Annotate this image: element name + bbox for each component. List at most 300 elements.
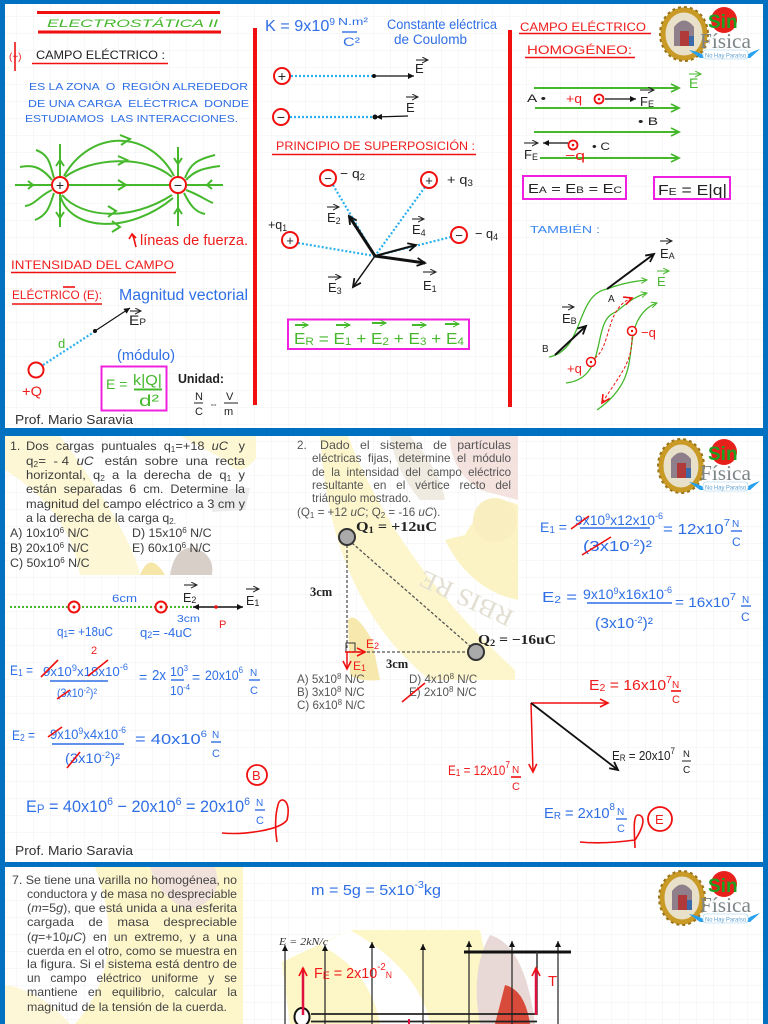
diagram: suma vectorial: 1	[456, 768, 461, 779]
watermark: escudo problema 2: RBIS RE	[415, 564, 518, 631]
formula box: FE = E|q|: FE = E|q|	[658, 183, 727, 199]
text: enunciado problema 1: N/C	[64, 526, 89, 540]
solución: E2: )²	[110, 750, 120, 766]
formula box: EA = EB = EC: E A = E B = E C	[528, 182, 623, 196]
text: enunciado problema 2: de la intensidad del campo eléctrico	[312, 466, 511, 479]
text: enunciado problema 2: triángulo mostrado.	[312, 492, 411, 505]
diagram: triángulo de cargas: = −16uC	[495, 632, 556, 647]
respuesta: E	[648, 807, 672, 831]
text: enunciado problema 2: 8	[338, 698, 343, 707]
text: enunciado problema 1: y	[231, 468, 246, 482]
diagram: superposición de campos: 2	[360, 172, 365, 182]
text: enunciado problema 2: = +12 uC; Q	[318, 506, 381, 519]
diagram: cargas en la recta: = -4uC	[152, 625, 192, 640]
formula box: E = k|Q|/d²: d²	[139, 393, 160, 410]
solución: E2 problema 2: = 16x10	[675, 594, 725, 610]
diagram: suma vectorial: 7	[666, 675, 672, 686]
text: enunciado problema 1: 6	[182, 526, 187, 535]
solución: E1 problema 2: =	[555, 519, 567, 535]
diagram: cargas en la recta: q	[57, 624, 64, 639]
formula box: E = k|Q|/d²: E =	[106, 376, 127, 392]
text: enunciado problema 1: 2	[100, 474, 105, 483]
solución: E2	[12, 725, 221, 768]
diagram: superposición de campos: E	[327, 210, 336, 225]
solución: E2: x4x10	[83, 727, 118, 742]
solución: EP: − 20x10	[113, 797, 176, 816]
heading: campo eléctrico homogéneo: HOMOGÉNEO:	[527, 42, 632, 57]
solución: E1: =	[192, 669, 200, 685]
diagram: campo de carga positiva: +	[278, 68, 286, 84]
text: enunciado problema 1: 2.	[169, 517, 176, 526]
diagram: suma vectorial	[448, 675, 691, 793]
diagram: superposición de campos: +q	[268, 217, 283, 232]
formula: masa: m = 5g = 5x10	[311, 882, 407, 899]
solución: ER	[544, 802, 627, 835]
text: unidad: ⇔	[209, 399, 218, 409]
text: enunciado problema 2: Dado el sistema de partículas	[320, 439, 511, 452]
diagram: triángulo de cargas: 2	[490, 638, 496, 648]
solución: E1: )²	[90, 686, 97, 700]
diagram: campo uniforme: −q	[565, 148, 585, 163]
text: enunciado problema 7: la figura. Si el sistema está dentro de	[27, 957, 237, 971]
diagram: campo de carga negativa	[273, 97, 418, 125]
diagram: cargas en la recta: 3cm	[177, 614, 200, 625]
solución: E2: 9x10	[50, 727, 79, 742]
formula: constante de Coulomb: Constante eléctrica	[387, 17, 497, 32]
diagram: campo no uniforme: E	[660, 246, 669, 261]
diagram: suma vectorial: = 20x10	[626, 748, 671, 763]
diagram: cargas en la recta	[10, 585, 259, 640]
text: enunciado problema 7: conductora y de masa no despreciable	[27, 887, 237, 901]
solución: EP: 6	[176, 796, 181, 808]
solución: E2: 9	[78, 726, 83, 736]
solución: E1 problema 2: C	[732, 535, 741, 549]
text: enunciado problema 2: D) 4x10	[409, 673, 450, 686]
diagram: campo de carga positiva	[274, 60, 428, 84]
diagram: campo uniforme: E	[689, 75, 698, 91]
solución: EP: 6	[107, 796, 113, 808]
solución: E2: E	[12, 727, 21, 743]
formula box: E = k|Q|/d²: k|Q|	[133, 372, 162, 389]
respuesta: B	[247, 765, 267, 785]
formula: constante de Coulomb: de Coulomb	[394, 32, 467, 47]
text: enunciado problema 1: N/C	[187, 526, 212, 540]
text: enunciado problema 2	[297, 439, 511, 712]
solución: E2: N	[212, 730, 219, 741]
text: unidad: N	[195, 391, 203, 403]
formula box: campo resultante: 3	[420, 336, 426, 348]
solución: ER: E	[544, 805, 554, 822]
icon: charge symbol	[9, 42, 22, 71]
text: enunciado problema 2: N/C	[341, 673, 365, 686]
diagram: triángulo de cargas: E	[353, 659, 361, 673]
text: unidad: m	[224, 406, 233, 418]
text: enunciado problema 7: magnitud de la tensión de la cuerda.	[27, 1000, 227, 1014]
diagram: campo uniforme: +q	[566, 91, 582, 106]
solución: E2 problema 2: -6	[664, 585, 672, 595]
logo: sin física: Física	[700, 29, 752, 53]
text: enunciado problema 2: 8	[449, 685, 454, 694]
solución: E1: C	[250, 685, 258, 697]
diagram: varilla en campo uniforme	[278, 936, 571, 1024]
diagram: suma vectorial: 2	[600, 683, 606, 694]
diagram: cargas en la recta: q	[140, 625, 147, 640]
diagram: cargas en la recta: 1	[254, 598, 259, 608]
respuesta: E: E	[655, 812, 664, 827]
diagram: suma vectorial: N	[512, 765, 519, 776]
text: enunciado problema 1: q	[26, 454, 33, 468]
text: enunciado problema 1: 2	[33, 460, 39, 469]
text: enunciado problema 1: E) 60x10	[132, 541, 182, 555]
solución: E1: 2x	[152, 667, 166, 684]
formula box: campo resultante: + E	[351, 331, 382, 348]
text: enunciado problema 1: 6	[60, 526, 65, 535]
diagram: campo de carga positiva: E	[415, 61, 424, 76]
diagram: campo de carga puntual: +Q	[22, 383, 42, 399]
text: enunciado problema 1: 1	[227, 474, 232, 483]
diagram: superposición de campos: + q	[447, 172, 465, 187]
solución: E1 problema 2: 7	[724, 518, 730, 529]
text: también: TAMBIÉN :	[530, 223, 600, 236]
diagram: suma vectorial: N	[683, 749, 690, 760]
diagram: varilla en campo uniforme: -2	[377, 962, 386, 973]
solución: E1: -2	[84, 686, 90, 695]
positive charge	[52, 177, 68, 193]
text: enunciado problema 2: resultante en el vértice recto del	[312, 479, 511, 492]
formula: constante de Coulomb: K = 9x10	[265, 18, 329, 35]
diagram: suma vectorial: R	[620, 753, 626, 763]
solución: E2 problema 2: C	[741, 610, 750, 624]
diagram: varilla en campo uniforme: E = 2kN/c	[278, 936, 328, 948]
text: enunciado problema 1: a la derecha de q	[105, 468, 227, 482]
diagram: superposición de campos: 3	[467, 178, 473, 188]
diagram: superposición de campos: +	[286, 233, 294, 248]
diagram: suma vectorial: C	[683, 765, 690, 776]
diagram: triángulo de cargas: 3cm	[310, 585, 333, 599]
solución: EP	[26, 796, 265, 827]
solución: EP: N	[256, 798, 263, 809]
formula box: campo resultante: 2	[382, 336, 389, 348]
logo: sin física 2: No Hay Paraíso	[705, 486, 747, 492]
text: definición	[25, 80, 249, 125]
diagram: superposición de campos: E	[328, 280, 337, 295]
flourish: subrayado E	[580, 815, 643, 848]
solución: E2 problema 2: x16x10	[619, 586, 664, 602]
solución: E1 problema 2: E	[540, 519, 549, 535]
diagram: superposición de campos: −	[324, 171, 332, 186]
callout: líneas de fuerza: líneas de fuerza.	[140, 232, 248, 249]
diagram: campo no uniforme: E	[562, 311, 571, 326]
diagram: triángulo de cargas: 3cm	[386, 657, 409, 671]
diagram: superposición de campos: − q	[340, 166, 358, 181]
text: enunciado problema 1: N/C	[65, 556, 90, 570]
formula box: campo resultante: + E	[389, 331, 420, 348]
text: enunciado problema 1: 6	[182, 541, 187, 550]
text: enunciado problema 2: 8	[337, 672, 342, 681]
formula box: campo resultante: R	[305, 336, 314, 348]
diagram: triángulo de cargas: Q	[356, 519, 367, 534]
solución: E2 problema 2	[542, 585, 751, 632]
formula box: campo resultante: E	[294, 331, 305, 348]
diagram: suma vectorial: = 16x10	[605, 677, 666, 694]
formula box: FE = E|q|	[654, 177, 730, 199]
text: enunciado problema 2: N/C	[454, 673, 477, 686]
diagram: superposición de campos: 1	[282, 223, 287, 233]
respuesta: B: B	[252, 768, 261, 783]
solución: E2 problema 2: N	[742, 595, 749, 606]
solución: E1: 2	[91, 645, 97, 657]
logo: sin física 3: No Hay Paraíso	[705, 918, 747, 924]
heading: campo eléctrico homogéneo: CAMPO ELÉCTRICO	[520, 19, 646, 34]
diagram: campo no uniforme: A	[608, 294, 615, 305]
text: enunciado problema 2: 8	[450, 672, 455, 681]
text: enunciado problema 1: C) 50x10	[10, 556, 60, 570]
diagram: cargas en la recta: E	[246, 594, 254, 608]
solución: E1: 3	[184, 664, 189, 673]
text: enunciado problema 7: mantiene en equilibrio, calcular la	[27, 985, 237, 999]
solución: E1: 9	[72, 663, 77, 673]
diagram: suma vectorial: E	[612, 748, 621, 763]
solución: E2 problema 2: 2	[554, 595, 562, 606]
formula box: E = k|Q|/d²	[102, 366, 166, 410]
text: enunciado problema 7: cuerda en el otro, como se muestra en	[27, 944, 237, 958]
diagram: varilla en campo uniforme: F	[314, 965, 323, 982]
diagram: triángulo de cargas: = +12uC	[374, 519, 437, 534]
diagram: campo uniforme: F	[640, 94, 648, 109]
text: magnitud vectorial: Magnitud vectorial	[119, 287, 248, 304]
solución: E1: -4	[183, 683, 190, 692]
diagram: suma vectorial: E	[448, 762, 457, 778]
solución: E1 problema 2: x12x10	[610, 512, 655, 528]
heading: intensidad del campo eléctrico: ELÉCTRICO (E):	[12, 287, 102, 302]
diagram: superposición de campos: 2	[336, 216, 341, 226]
diagram: campo uniforme: A •	[527, 93, 546, 105]
negative charge	[170, 177, 186, 193]
text: unidad: V	[226, 391, 234, 403]
diagram: campo no uniforme: A	[669, 251, 675, 261]
text: enunciado problema 2: E) 2x10	[409, 686, 449, 699]
solución: E1: 10	[170, 683, 184, 698]
diagram: superposición de campos: E	[412, 222, 421, 237]
formula box: campo resultante: + E	[426, 331, 457, 348]
heading: intensidad del campo eléctrico	[11, 260, 176, 304]
diagram: campo de carga negativa: −	[277, 109, 285, 125]
text: enunciado problema 1: B) 20x10	[10, 541, 60, 555]
diagram: campo uniforme	[524, 74, 701, 163]
text: enunciado problema 7	[12, 873, 237, 1014]
solución: ER: 8	[610, 802, 615, 813]
diagram: cargas en la recta: 2	[191, 595, 196, 605]
logo: sin física 2: Sin	[708, 444, 738, 465]
solución: E1: 6	[239, 665, 243, 675]
solución: E2: -2	[102, 750, 110, 760]
heading: electrostática II: ELECTROSTÁTICA II	[47, 17, 218, 30]
diagram: varilla en campo uniforme: N	[386, 970, 392, 980]
text: enunciado problema 1: N/C	[64, 541, 89, 555]
solución: E1 problema 2: 1	[549, 525, 555, 536]
diagram: campo no uniforme: B	[571, 316, 577, 326]
solución: E1 problema 2	[540, 511, 742, 555]
solución: E1: -6	[120, 662, 128, 672]
positive charge: +	[56, 177, 64, 193]
diagram: suma vectorial: 7	[505, 760, 510, 771]
logo: sin física: Sin	[708, 12, 738, 33]
solución: E2 problema 2: )²	[643, 615, 653, 632]
diagram: suma vectorial: C	[672, 694, 680, 706]
text: enunciado problema 1: = - 4 uC están sobre una recta	[38, 454, 234, 468]
solución: E2 problema 2: 9	[614, 586, 619, 596]
diagram: campo no uniforme: B	[542, 344, 549, 355]
formula: constante de Coulomb: 9	[329, 17, 335, 28]
solución: E2: -6	[118, 725, 126, 735]
solución: EP: C	[256, 815, 264, 827]
solución: EP: E	[26, 797, 37, 816]
diagram: campo no uniforme: E	[657, 274, 666, 289]
logo: sin física 2	[658, 439, 760, 493]
text: enunciado problema 1: =+18 uC y	[175, 439, 244, 453]
solución: E1: 9x10	[43, 664, 71, 679]
heading: principio de superposición: PRINCIPIO DE SUPERPOSICIÓN :	[276, 140, 475, 153]
tachaduras rojas E2	[48, 727, 80, 768]
formula box: EA = EB = EC	[523, 176, 626, 199]
text: enunciado problema 2: N/C	[341, 686, 365, 699]
solución: E1 problema 2: 9	[605, 512, 610, 522]
logo: sin física 3: Sin	[708, 876, 738, 897]
middle column divider	[508, 30, 512, 407]
diagram: campo uniforme: • C	[592, 141, 610, 153]
solución: E1 problema 2: (3x10	[583, 538, 621, 555]
solución: E1 problema 2: )²	[640, 538, 652, 555]
text: enunciado problema 2: C) 6x10	[297, 699, 338, 712]
diagram: superposición de campos: − q	[475, 226, 493, 241]
text: enunciado problema 1: A) 10x10	[10, 526, 60, 540]
solución: E1: E	[10, 662, 19, 678]
text: enunciado problema 7: cargada de masa despreciable	[27, 915, 237, 929]
diagram: cargas en la recta: = +18uC	[68, 624, 113, 639]
panel: problema 7	[5, 867, 763, 1024]
solución: E2 problema 2: 9x10	[583, 586, 613, 602]
diagram: triángulo de cargas: Q	[478, 632, 489, 647]
solución: EP: = 20x10	[181, 797, 244, 816]
solución: E1 problema 2: 9x10	[575, 512, 605, 528]
solución: E1 problema 2: N	[732, 519, 739, 530]
diagram: campo de carga puntual: EP	[129, 312, 146, 328]
diagram: superposición de campos: +	[425, 173, 433, 188]
left column divider	[253, 28, 257, 405]
formula box: campo resultante	[288, 320, 469, 349]
solución: E2: =	[25, 727, 35, 743]
diagram: superposición de campos: 4	[421, 228, 426, 238]
text: enunciado problema 1: magnitud del campo eléctrico a 3 cm y	[26, 497, 246, 511]
solución: ER: R	[554, 811, 561, 822]
formula box: campo resultante: 4	[457, 336, 464, 348]
formula box: campo resultante: = E	[314, 331, 345, 348]
diagram: suma vectorial: E	[589, 677, 599, 694]
diagram: suma vectorial: 7	[671, 746, 675, 756]
solución: E1: (3x10	[57, 686, 87, 700]
logo: sin física	[660, 7, 760, 61]
text: enunciado problema 2: = -16 uC).	[388, 506, 440, 519]
diagram: cargas en la recta: P	[219, 619, 226, 631]
formula: constante de Coulomb: N.m²	[338, 17, 369, 28]
diagram: campo no uniforme: +q	[567, 361, 582, 376]
text: enunciado problema 1: D) 15x10	[132, 526, 182, 540]
text: enunciado problema 1: están separadas 6 cm. Determine la	[26, 482, 245, 496]
diagram: campo uniforme: E	[648, 99, 654, 109]
diagram: campo de carga puntual	[22, 308, 146, 399]
text: enunciado problema 2: (Q	[297, 506, 310, 519]
marca respuesta E	[402, 683, 425, 702]
formula: constante de Coulomb: C²	[343, 35, 360, 49]
diagram: campo uniforme: F	[524, 147, 532, 162]
text: módulo: (módulo)	[117, 348, 175, 364]
solución: EP: P	[37, 802, 44, 816]
text: definición: DE UNA CARGA ELÉCTRICA DONDE	[28, 97, 249, 110]
diagram: campo de carga puntual: d	[58, 336, 65, 351]
tachaduras rojas	[571, 516, 611, 555]
negative charge: −	[174, 177, 182, 193]
diagram: triángulo de cargas: 1	[369, 525, 375, 535]
logo: sin física 3	[659, 871, 760, 925]
solución: E2: (3x10	[65, 750, 100, 766]
text: enunciado problema 1: 1.	[10, 439, 20, 453]
watermark: escudo problema 7	[5, 867, 535, 1024]
solución: E1: 1	[18, 668, 23, 679]
logo: sin física 2: Física	[700, 461, 752, 485]
solución: ER: = 2x10	[561, 805, 610, 822]
solución: E1: =	[23, 662, 33, 678]
text: enunciado problema 2: 2	[381, 511, 386, 520]
text: unidad: C	[195, 406, 203, 418]
text: enunciado problema 1: 1	[171, 445, 176, 454]
text: autor: Prof. Mario Saravia	[15, 413, 133, 427]
panel: problemas 1 y 2	[5, 436, 763, 862]
diagram: triángulo de cargas	[310, 519, 556, 673]
watermark: escudo problema 1	[5, 436, 256, 575]
diagram: triángulo de cargas: E	[366, 637, 374, 651]
solución: E1: =	[139, 669, 147, 685]
text: unidad	[178, 372, 238, 418]
diagram: suma vectorial: N	[672, 680, 679, 691]
text: enunciado problema 7: (m=5g), que está unida a una esferita	[27, 901, 237, 915]
formula: masa: kg	[424, 882, 441, 899]
diagram: superposición de campos	[268, 166, 498, 296]
text: enunciado problema 1: 6	[60, 541, 65, 550]
solución: ER: N	[617, 807, 624, 818]
text: enunciado problema 2: B) 3x10	[297, 686, 337, 699]
heading: campo eléctrico homogéneo	[519, 19, 651, 58]
diagram: líneas de campo	[15, 135, 223, 232]
solución: E2 problema 2: E	[542, 589, 552, 606]
heading: intensidad del campo eléctrico: INTENSIDAD DEL CAMPO	[11, 260, 174, 272]
diagram: campo de carga negativa: E	[406, 100, 415, 115]
flourish: subrayado respuesta	[222, 800, 288, 842]
solución: E2 problema 2: 7	[730, 592, 736, 603]
text: enunciado problema 1: N/C	[186, 541, 211, 555]
diagram: cargas en la recta: 6cm	[112, 593, 137, 605]
diagram: superposición de campos: 3	[337, 286, 342, 296]
diagram: superposición de campos: −	[455, 228, 463, 243]
text: enunciado problema 7: 7. Se tiene una varilla no homogénea, no	[12, 873, 237, 887]
solución: E2: 6	[201, 729, 207, 739]
solución: E1 problema 2: -6	[655, 511, 663, 521]
icon: charge symbol: (+)	[9, 52, 22, 63]
text: enunciado problema 2: 8	[337, 685, 342, 694]
text: enunciado problema 1	[10, 439, 246, 570]
diagram: superposición de campos: 4	[493, 232, 498, 242]
logo: sin física 3: Física	[700, 893, 752, 917]
solución: E1 problema 2: -2	[630, 538, 640, 548]
